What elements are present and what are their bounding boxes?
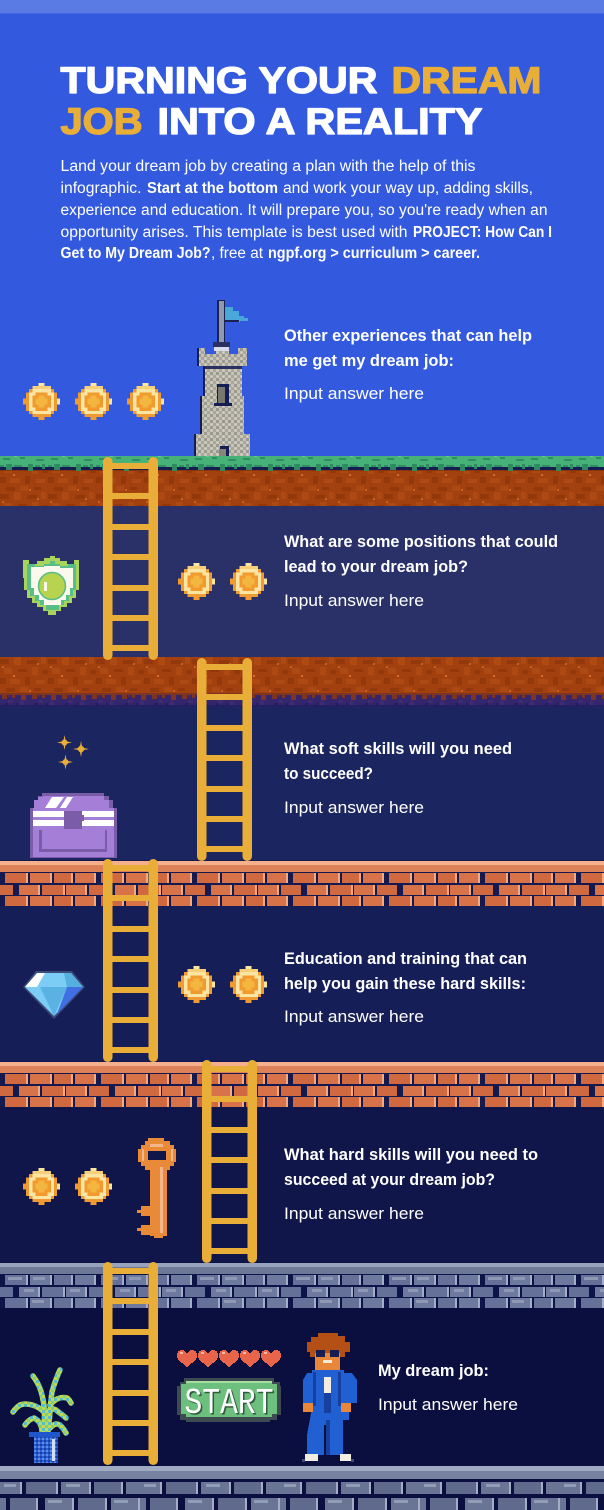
ladder 3: [103, 859, 158, 1062]
title: TURNING YOUR: [60, 60, 378, 101]
question: my dream job: Input answer here: [378, 1395, 518, 1414]
intro text: Start at the bottom: [147, 180, 278, 197]
icon: treasure chest: [30, 793, 117, 858]
question: soft skills: What soft skills will you need: [284, 739, 512, 758]
question: education: [284, 949, 527, 1026]
question: hard skills: Input answer here: [284, 1204, 424, 1223]
ladder 2: [197, 658, 252, 861]
intro text: ngpf.org > curriculum > career.: [268, 245, 480, 262]
icon: potted plant: [13, 1370, 71, 1463]
icon: hearts: [177, 1350, 281, 1367]
intro text: infographic.: [60, 180, 142, 197]
icon: coins row four: [178, 966, 267, 1003]
brick floor 2: [0, 1061, 604, 1107]
title: DREAM: [392, 60, 542, 101]
question: education: Education and training that can: [284, 949, 527, 968]
question: positions: What are some positions that could: [284, 532, 558, 551]
ground: grass and dirt: [0, 456, 604, 506]
question: positions: Input answer here: [284, 591, 424, 610]
icon: key: [137, 1138, 176, 1238]
intro text: and work your way up, adding skills,: [283, 180, 533, 197]
icon: shield: [23, 556, 79, 615]
title: INTO A REALITY: [158, 101, 483, 142]
stone floor 2: [0, 1466, 604, 1510]
question: other experiences: Input answer here: [284, 384, 424, 403]
question: other experiences: me get my dream job:: [284, 351, 454, 370]
intro text: Land your dream job by creating a plan with the help of this: [60, 158, 476, 175]
question: positions: lead to your dream job?: [284, 557, 468, 576]
question: my dream job: My dream job:: [378, 1361, 489, 1380]
start button: START: [186, 1384, 275, 1426]
question: other experiences: [284, 326, 532, 403]
question: my dream job: [378, 1361, 518, 1414]
intro text: Get to My Dream Job?: [60, 245, 210, 262]
ladder 5: [103, 1262, 158, 1465]
icon: sparkles: [57, 735, 89, 770]
ladder 4: [202, 1060, 257, 1263]
icon: coins row two: [178, 563, 267, 600]
brick floor 1: [0, 860, 604, 906]
question: other experiences: Other experiences that can help: [284, 326, 532, 345]
question: hard skills: [284, 1145, 538, 1223]
question: hard skills: succeed at your dream job?: [284, 1170, 495, 1189]
intro text: [60, 158, 552, 262]
title: JOB: [60, 101, 142, 142]
intro text: opportunity arises. This template is best used with: [60, 224, 408, 241]
start button: START: [184, 1383, 274, 1424]
stone floor 1: [0, 1262, 604, 1308]
question: soft skills: Input answer here: [284, 798, 424, 817]
intro text: PROJECT: How Can I: [413, 224, 552, 241]
character: person in blue suit: [302, 1333, 357, 1462]
question: hard skills: What hard skills will you need to: [284, 1145, 538, 1164]
ladder 1: [103, 457, 158, 660]
icon: diamond: [23, 971, 85, 1019]
ground: dirt with purple fringe: [0, 657, 604, 707]
intro text: , free at: [211, 245, 264, 262]
title: [60, 60, 542, 142]
question: education: Input answer here: [284, 1007, 424, 1026]
icon: coins row five: [23, 1168, 112, 1205]
question: soft skills: [284, 739, 512, 817]
icon: coins row top: [23, 383, 164, 420]
question: education: help you gain these hard skills:: [284, 974, 526, 993]
question: soft skills: to succeed?: [284, 764, 373, 783]
intro text: experience and education. It will prepare you, so you're ready when an: [60, 202, 548, 219]
icon: castle tower: [194, 300, 250, 456]
question: positions: [284, 532, 558, 610]
